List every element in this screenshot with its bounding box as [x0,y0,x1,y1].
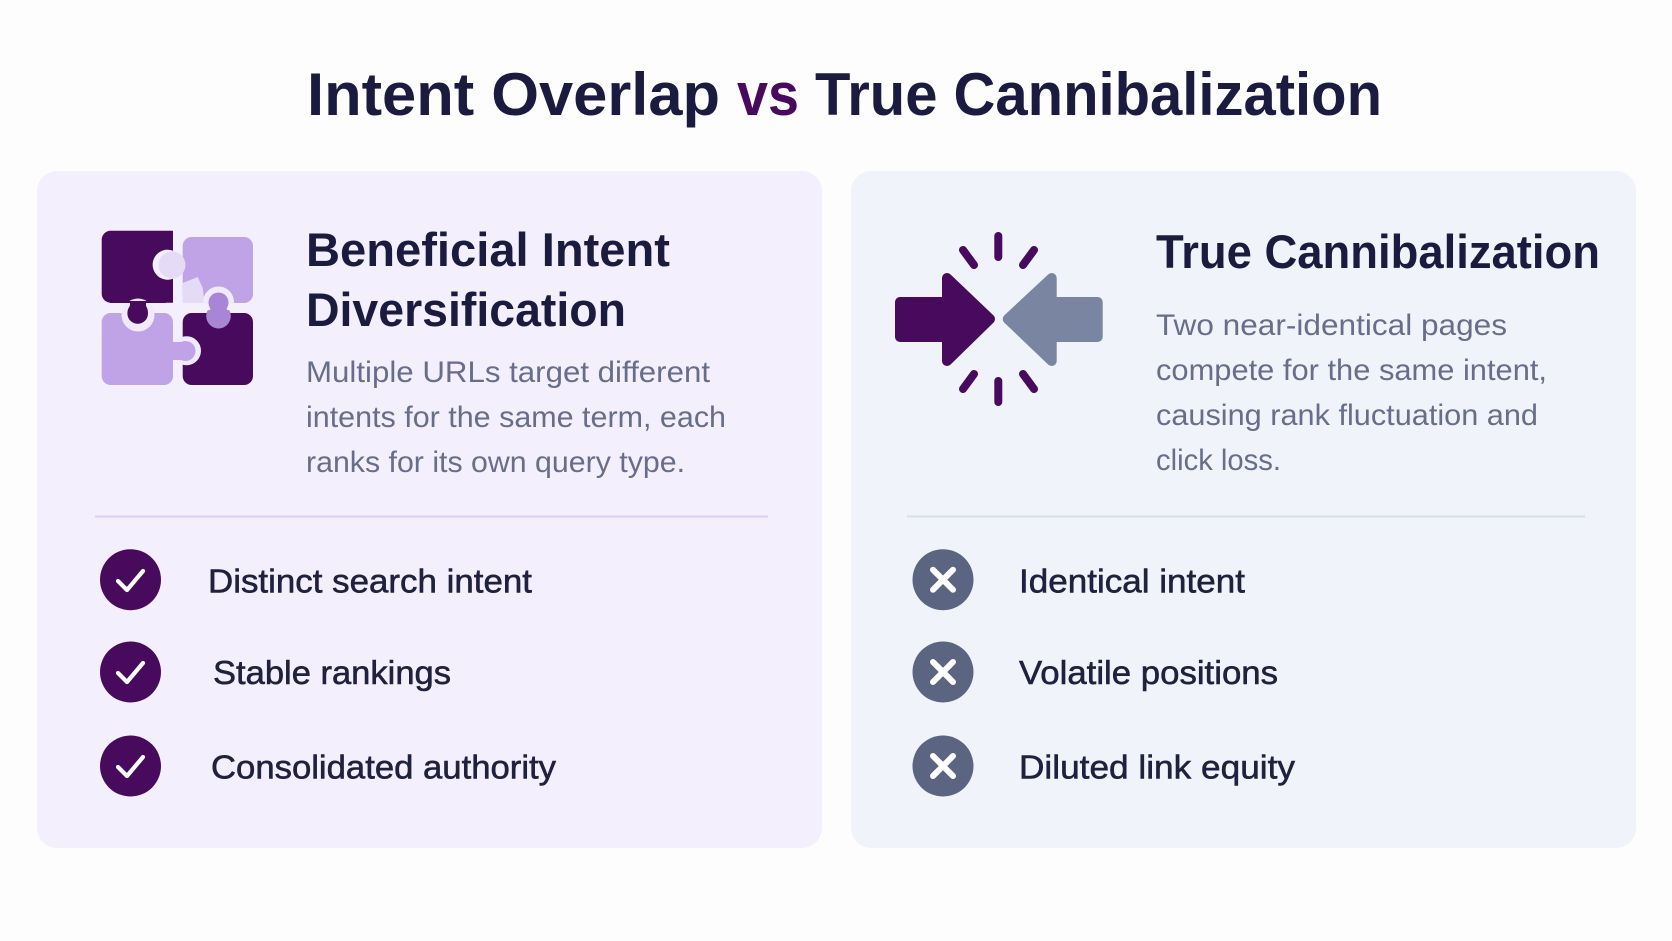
description: click loss. [1156,444,1281,477]
description: ranks for its own query type. [306,446,685,479]
heading [306,223,670,336]
item: identical intent [912,549,1245,610]
title: True Cannibalization [815,61,1382,128]
heading: Diversification [306,283,626,336]
item: consolidated authority [100,736,557,796]
title: Intent Overlap [307,61,720,128]
item: distinct search intent [100,549,532,610]
description: Two near-identical pages [1156,309,1507,342]
description: compete for the same intent, [1156,354,1547,387]
item: consolidated authority: Consolidated authority [211,748,557,786]
description: intents for the same term, each [306,401,726,434]
item: volatile positions [912,642,1278,702]
title: vs [737,61,799,128]
item: distinct search intent: Distinct search intent [208,562,532,600]
heading: True Cannibalization [1156,225,1600,278]
item: volatile positions: Volatile positions [1019,654,1278,691]
panel: beneficial intent diversification [37,171,822,848]
item: identical intent: Identical intent [1019,562,1245,600]
title [307,61,1382,128]
item: diluted link equity [912,736,1296,796]
item: stable rankings: Stable rankings [213,654,451,691]
description: Multiple URLs target different [306,356,711,389]
description [1156,309,1547,477]
item: diluted link equity: Diluted link equity [1019,748,1296,786]
description: causing rank fluctuation and [1156,399,1538,432]
icon: colliding arrows [900,236,1098,402]
description [306,356,726,479]
heading: Beneficial Intent [306,223,670,276]
panel: true cannibalization [851,171,1636,848]
item: stable rankings [100,642,451,702]
icon: puzzle pieces [102,231,253,385]
